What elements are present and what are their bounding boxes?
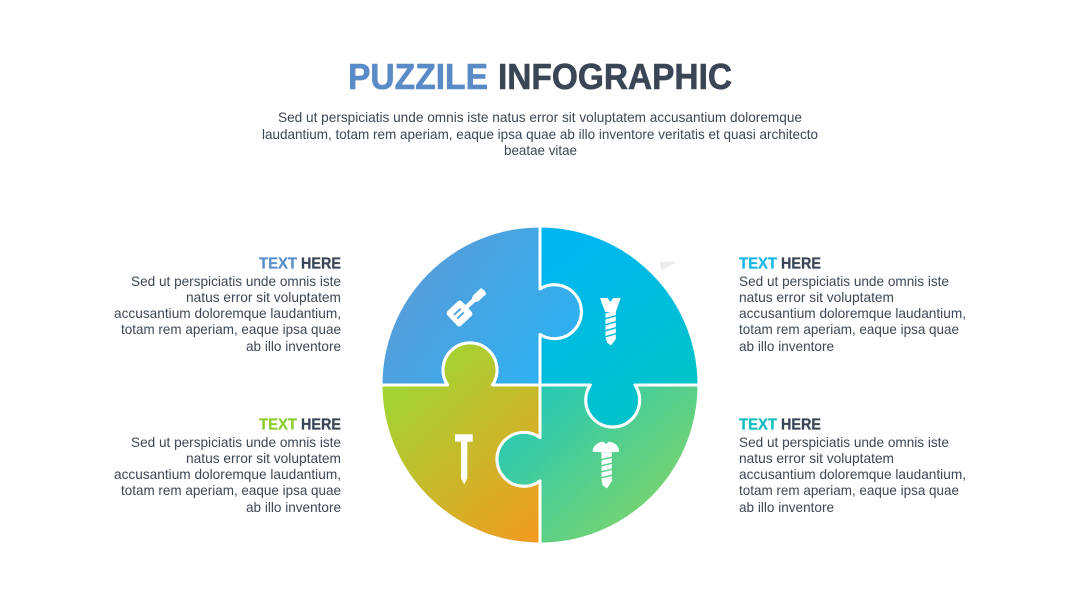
intro text block (262, 109, 818, 158)
heading: bottom right: TEXT (739, 416, 777, 434)
heading: bottom left: TEXT (259, 416, 297, 434)
panel: top right text (739, 256, 966, 354)
icon: round head screw (593, 442, 619, 488)
puzzle piece: bottom left (381, 343, 540, 544)
text block: top right: natus error sit voluptatem (739, 289, 894, 305)
icon: countersunk screw (600, 298, 621, 346)
heading: top right (739, 256, 821, 272)
text block: top right: accusantium doloremque laudantium, (739, 305, 966, 321)
heading: top left: TEXT (259, 256, 297, 272)
text block: bottom left: Sed ut perspiciatis unde omnis iste (131, 434, 341, 450)
text block: top right: ab illo inventore (739, 338, 834, 354)
text block: top left (114, 273, 341, 354)
text block: bottom left: totam rem aperiam, eaque ipsa quae (121, 482, 341, 498)
panel: bottom right text (739, 416, 966, 515)
title: PUZZILE (348, 56, 488, 97)
puzzle piece: bottom right (497, 385, 699, 544)
text block: bottom right: totam rem aperiam, eaque ipsa quae (739, 482, 959, 498)
heading: top right: TEXT (739, 256, 777, 272)
text block: bottom right: Sed ut perspiciatis unde omnis iste (739, 434, 949, 450)
heading: bottom right: HERE (781, 416, 821, 434)
text block: bottom right: accusantium doloremque laudantium, (739, 466, 966, 482)
icon: screwdriver (445, 283, 491, 328)
text block: bottom left: ab illo inventore (246, 499, 341, 515)
text block: top right: Sed ut perspiciatis unde omnis iste (739, 273, 949, 289)
text block: bottom left: accusantium doloremque laudantium, (114, 466, 341, 482)
heading: bottom left: HERE (301, 416, 341, 434)
puzzle piece: top right (540, 226, 699, 427)
title (348, 56, 732, 97)
text block: top right (739, 273, 966, 354)
text block: top right: totam rem aperiam, eaque ipsa quae (739, 321, 959, 337)
text block: top left: totam rem aperiam, eaque ipsa quae (121, 321, 341, 337)
intro text block: beatae vitae (504, 142, 577, 158)
heading: bottom left (259, 416, 341, 434)
title: INFOGRAPHIC (498, 56, 732, 97)
text block: bottom right: natus error sit voluptatem (739, 450, 894, 466)
text block: bottom left: natus error sit voluptatem (186, 450, 341, 466)
text block: bottom left (114, 434, 341, 515)
decorative artifact: pale triangle (659, 262, 677, 270)
intro text block: laudantium, totam rem aperiam, eaque ipsa quae ab illo inventore veritatis et quasi architecto (262, 126, 818, 142)
puzzle circle (381, 226, 699, 544)
heading: bottom right (739, 416, 821, 434)
icon: nail (455, 434, 473, 484)
text block: top left: ab illo inventore (246, 338, 341, 354)
text block: top left: Sed ut perspiciatis unde omnis iste (131, 273, 341, 289)
text block: bottom right (739, 434, 966, 515)
heading: top left: HERE (301, 256, 341, 272)
panel: top left text (114, 256, 341, 354)
text block: top left: natus error sit voluptatem (186, 289, 341, 305)
panel: bottom left text (114, 416, 341, 515)
text block: top left: accusantium doloremque laudantium, (114, 305, 341, 321)
heading: top right: HERE (781, 256, 821, 272)
intro text block: Sed ut perspiciatis unde omnis iste natus error sit voluptatem accusantium doloremque (278, 109, 802, 125)
text block: bottom right: ab illo inventore (739, 499, 834, 515)
puzzle piece: top left (381, 226, 581, 385)
heading: top left (259, 256, 341, 272)
